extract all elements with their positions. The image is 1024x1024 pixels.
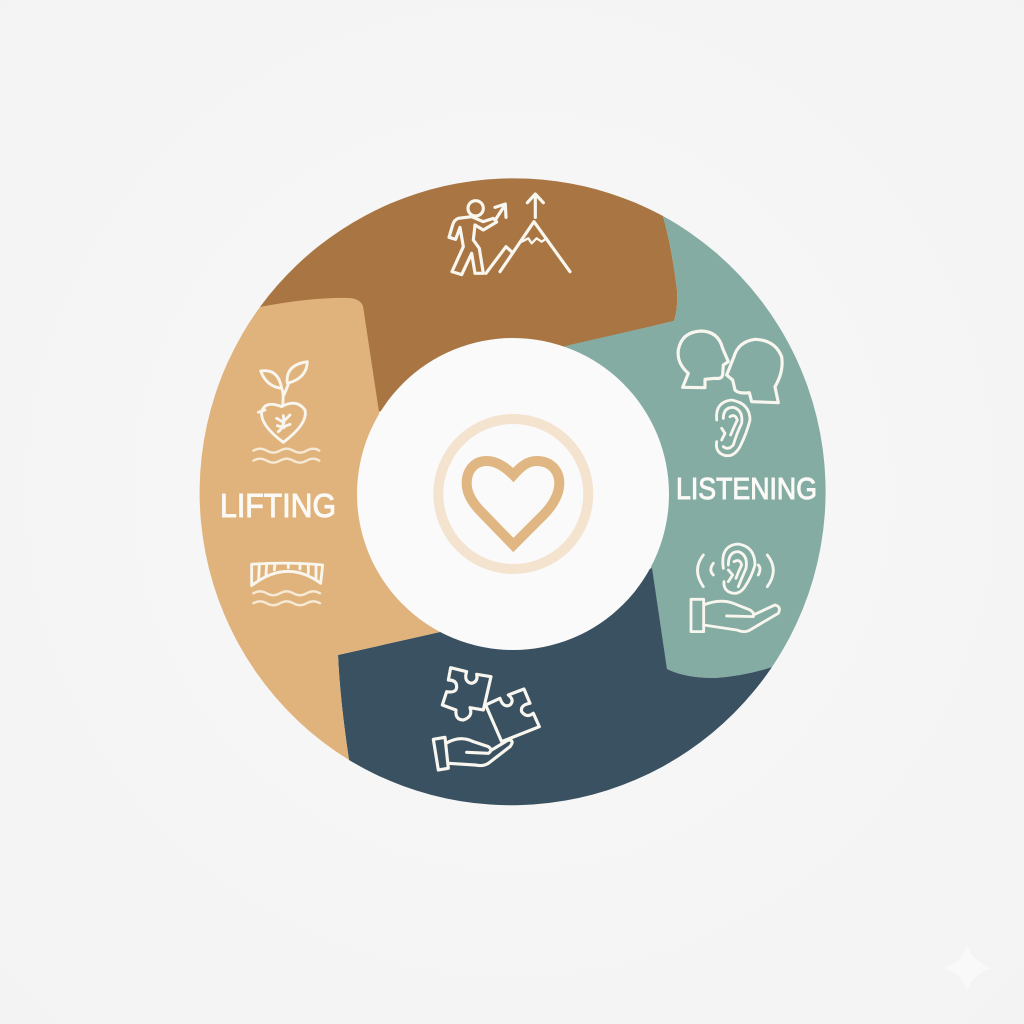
segment: navy bottom — [338, 568, 772, 805]
segment: teal right — [565, 216, 826, 678]
icon: ear — [716, 400, 750, 456]
icon: bridge over water — [252, 563, 323, 605]
icon: climber and mountain — [449, 194, 570, 275]
label: LIFTING: LIFTING — [220, 487, 336, 524]
watermark sparkle — [944, 944, 992, 992]
icon: puzzle pieces over hand — [433, 668, 539, 770]
icon: heart with sprout and waves — [253, 362, 319, 463]
icon: center heart — [467, 461, 559, 545]
center circle — [357, 338, 669, 650]
segment: brown top — [260, 178, 677, 412]
segment: tan left — [200, 298, 440, 760]
label: LISTENING: LISTENING — [676, 471, 817, 506]
center ring — [438, 419, 588, 569]
icon: ear with sound waves over hand — [691, 544, 779, 632]
icon: two heads — [678, 331, 782, 403]
